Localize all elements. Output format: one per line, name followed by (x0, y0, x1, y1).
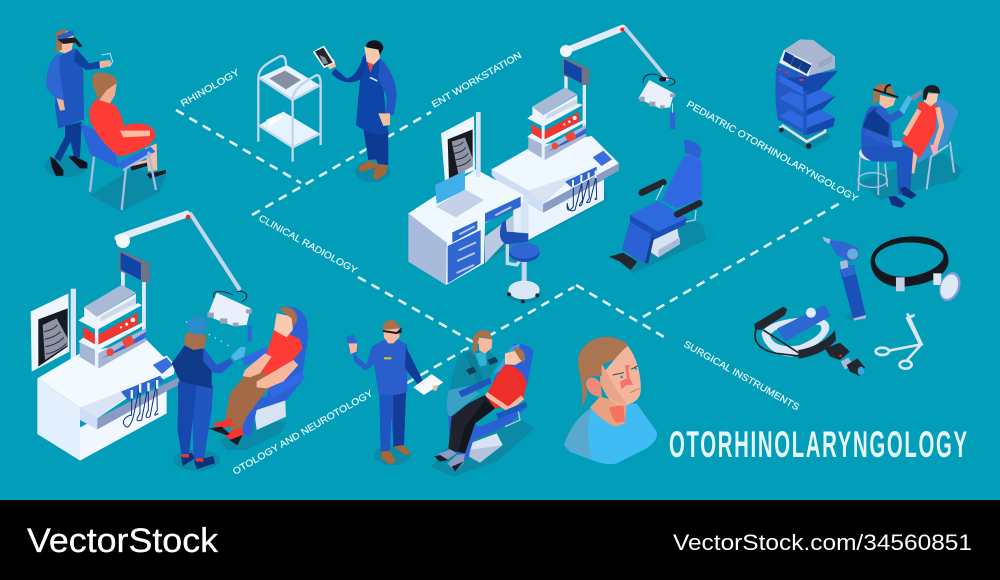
pedestal (650, 228, 680, 257)
child dress (902, 102, 937, 158)
touch panel (590, 148, 615, 169)
chair (267, 307, 308, 397)
tower reuse (78, 250, 150, 368)
seat (630, 201, 687, 240)
footer brand: VectorStock (27, 522, 219, 560)
cabinet body (37, 378, 80, 461)
stool (858, 157, 887, 195)
label: surgical instruments: SURGICAL INSTRUMENTS (682, 339, 801, 413)
patient trousers (448, 395, 495, 453)
examination dots (186, 321, 229, 346)
console lower front (528, 179, 604, 240)
label: rhinology: RHINOLOGY (179, 67, 242, 110)
figure: ENT console unit (492, 136, 619, 242)
figure: large unit arm and lamp (116, 213, 252, 342)
figure: rhinology doctor and seated patient (44, 30, 166, 212)
open shelves (778, 72, 835, 92)
x-ray light box (441, 116, 475, 182)
x-ray tablet (313, 46, 335, 68)
label: otology and neurotology: OTOLOGY AND NEUROTOLOGY (231, 388, 376, 478)
label: pediatric otorhinolaryngology: PEDIATRIC OTORHINOLARYNGOLOGY (685, 99, 860, 205)
footer bar (0, 500, 1000, 580)
label: clinical radiology: CLINICAL RADIOLOGY (257, 213, 360, 277)
doctor legs (54, 122, 82, 162)
figure: head mirror band (871, 236, 964, 304)
otoscope in hand (347, 334, 358, 355)
top housing (779, 39, 835, 76)
doctor torso (861, 106, 893, 147)
figure: pediatric doctor and child patient (858, 84, 963, 208)
armrest right (677, 203, 699, 214)
figure: ENT tower, monitor, arm and lamp (527, 27, 675, 160)
flowchart dashed connectors (176, 110, 842, 383)
tower and monitor (527, 57, 589, 160)
figure: surgical headlamp (754, 305, 865, 376)
articulated arm (566, 28, 623, 51)
armrest front (496, 402, 527, 419)
console left side (492, 168, 543, 240)
figure: doctor stool (500, 220, 541, 303)
figure: ENT workstation desk with laptop and drawers (408, 112, 528, 285)
figure: empty examination chair (609, 140, 707, 273)
figure: doctor holding x-ray tablet (313, 40, 397, 182)
doctor torso (172, 345, 212, 388)
patient chair back (80, 123, 118, 168)
laptop (435, 171, 465, 204)
touch panel (150, 355, 175, 379)
doctor legs (178, 382, 213, 460)
figure: standing doctor with clipboard (347, 320, 443, 465)
clinician (447, 387, 480, 417)
child chair (910, 98, 958, 163)
desk leg panels (485, 215, 513, 263)
small box (266, 113, 283, 127)
leg rest (622, 222, 652, 263)
x-ray light box (31, 293, 69, 372)
patient shirt (261, 327, 303, 377)
doctor trousers (861, 143, 913, 195)
figure: clinician examining reclined patient (432, 330, 535, 477)
foot rest (609, 253, 637, 270)
drawers (452, 221, 477, 243)
patient trousers (225, 368, 290, 430)
figure: blue equipment cart (775, 39, 838, 151)
desk top (408, 169, 524, 243)
label: ENT workstation: ENT WORKSTATION (430, 50, 524, 111)
title: OTORHINOLARYNGOLOGY (669, 425, 967, 466)
armrest left (642, 182, 663, 193)
patient dress (89, 98, 155, 157)
footer url: VectorStock.com/34560851 (673, 530, 972, 555)
chair back (493, 344, 533, 400)
patient shirt (487, 365, 527, 408)
shoes (434, 449, 465, 472)
console top (492, 136, 619, 204)
armrest (458, 377, 492, 397)
figure: surgical scissors (876, 313, 922, 369)
figure: otoscope (823, 237, 866, 321)
instrument holder (121, 376, 163, 401)
instrument holder (565, 167, 597, 187)
figure: head with highlighted sinuses (564, 337, 657, 464)
clipboard (413, 374, 443, 395)
chair base (469, 433, 503, 463)
figure: large ENT unit with tower (31, 250, 180, 461)
x-ray sheet (269, 71, 301, 89)
desk left side (408, 213, 447, 285)
desk front (446, 195, 523, 285)
hair and cap (184, 332, 207, 350)
surgical lamp (643, 74, 675, 86)
figure: doctor with patient in chair (172, 307, 308, 471)
figure: instrument trolley (258, 56, 321, 162)
